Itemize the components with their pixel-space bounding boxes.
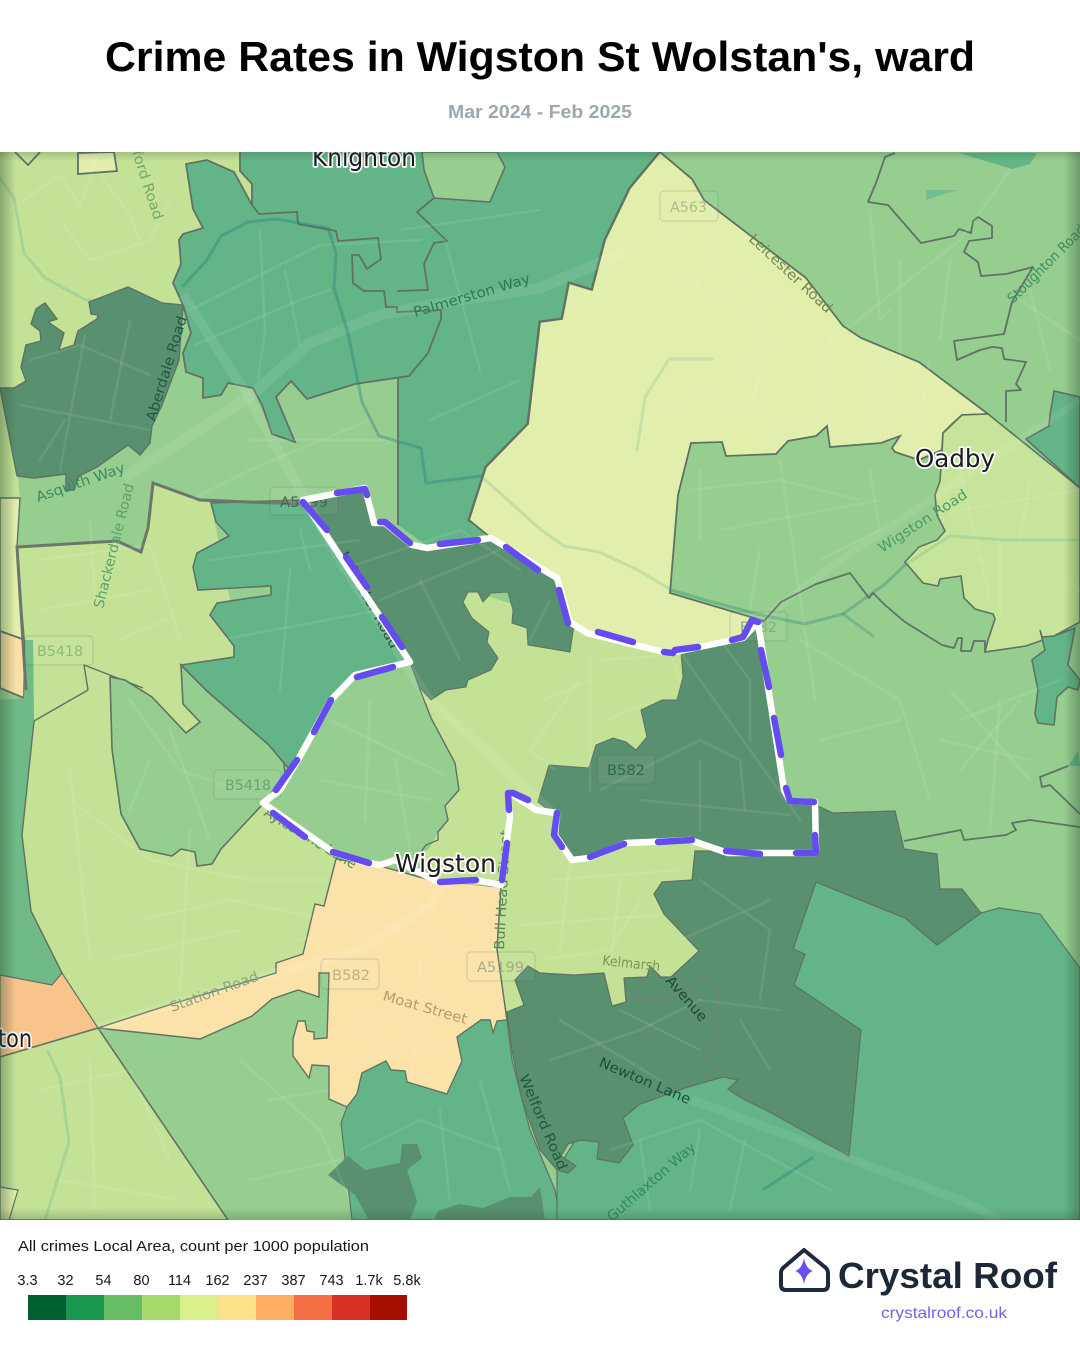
place labels [0, 143, 995, 1053]
region: west of ward green area [181, 500, 410, 770]
road labels: Leicester Road [336, 549, 402, 651]
legend values: 32 [57, 1273, 74, 1289]
legend values: 114 [168, 1273, 191, 1289]
road labels: Guthlaxton Way [604, 1139, 699, 1225]
boundary: eastern ward outlines [764, 153, 1080, 841]
road number shields: B5418 [37, 644, 83, 660]
road number shields: A5199 [477, 960, 524, 976]
map edge vignette [0, 152, 1080, 1220]
place labels: Wigston [395, 849, 496, 878]
legend values: 162 [205, 1273, 230, 1289]
road number shields: A5199 [280, 495, 328, 511]
road number shields: B582 [740, 620, 777, 636]
road labels: Kelmarsh [602, 953, 661, 975]
boundary: thick district lines [17, 483, 300, 690]
road labels: Leicester Road [745, 231, 835, 317]
road labels: Shackerdale Road [91, 482, 138, 610]
legend [17, 1239, 421, 1320]
region: northern green area [173, 152, 660, 548]
legend values: 387 [281, 1273, 306, 1289]
region: north-west low-rate area [0, 152, 252, 698]
road labels: ford Road [128, 148, 166, 222]
region: ward dark south-east section [538, 622, 815, 860]
road labels: Moat Street [381, 988, 469, 1028]
place labels: Knighton [312, 143, 416, 172]
road number shields: A563 [670, 200, 707, 216]
road labels: Bull Head Street [492, 829, 514, 950]
road number shields: B582 [332, 968, 370, 984]
region: south dark area [507, 806, 981, 1173]
region: Wigston centre peach area [98, 859, 507, 1107]
region: Oadby pale yellow area [469, 152, 988, 652]
legend values: 5.8k [393, 1273, 421, 1289]
region: ward dark north-west section [303, 487, 574, 700]
legend values: 54 [95, 1273, 112, 1289]
legend title: All crimes Local Area, count per 1000 population [18, 1239, 369, 1255]
rivers [0, 178, 1080, 1220]
road labels: Aylestone Lane [261, 805, 359, 873]
region: south-west light area [0, 1028, 228, 1220]
subtitle: date range: Mar 2024 - Feb 2025 [448, 102, 632, 122]
region: south green area [341, 1020, 560, 1220]
road number shields: B582 [607, 763, 645, 779]
legend values: 80 [133, 1273, 150, 1289]
region: south-west orange area [0, 973, 98, 1057]
region: south-east green area [557, 882, 1080, 1220]
road labels: Newton Lane [596, 1055, 693, 1108]
logo: Crystal Roof [781, 1250, 1058, 1322]
legend values: 1.7k [355, 1273, 383, 1289]
legend colour scale [28, 1295, 407, 1320]
road labels: Station Road [168, 969, 261, 1016]
road labels: Palmerston Way [412, 271, 532, 321]
region: north-west dark area [0, 287, 183, 490]
road labels [34, 148, 1080, 1225]
region: west-centre medium area [110, 665, 285, 866]
legend values [17, 1273, 421, 1289]
website: crystalroof.co.uk [881, 1305, 1008, 1322]
region: west low-rate area [17, 483, 336, 1028]
road number shields [25, 191, 787, 989]
road labels: Asquith Way [34, 460, 127, 506]
logo wordmark: Crystal Roof [838, 1255, 1058, 1296]
region: central low-rate area in ward [410, 590, 720, 1020]
place labels: Oadby [915, 444, 995, 473]
region: south small dark patches [328, 1144, 545, 1220]
road labels: Avenue [662, 973, 710, 1025]
road labels: Wigston Road [875, 487, 971, 556]
legend values: 237 [243, 1273, 268, 1289]
icon: house with star [781, 1250, 828, 1290]
ward boundary: white outline [263, 488, 816, 885]
road labels: Aberdale Road [144, 314, 191, 423]
road labels: Welford Road [515, 1072, 570, 1172]
title: Crime Rates in Wigston St Wolstan's, ward [105, 33, 975, 80]
region: Oadby light green area [905, 414, 1080, 652]
region: east-side green pockets [926, 153, 1080, 766]
legend values: 3.3 [17, 1273, 38, 1289]
road number shields: B5418 [225, 778, 271, 794]
legend values: 743 [319, 1273, 344, 1289]
ward boundary: purple dashes [273, 489, 816, 882]
street network [10, 150, 1080, 1220]
